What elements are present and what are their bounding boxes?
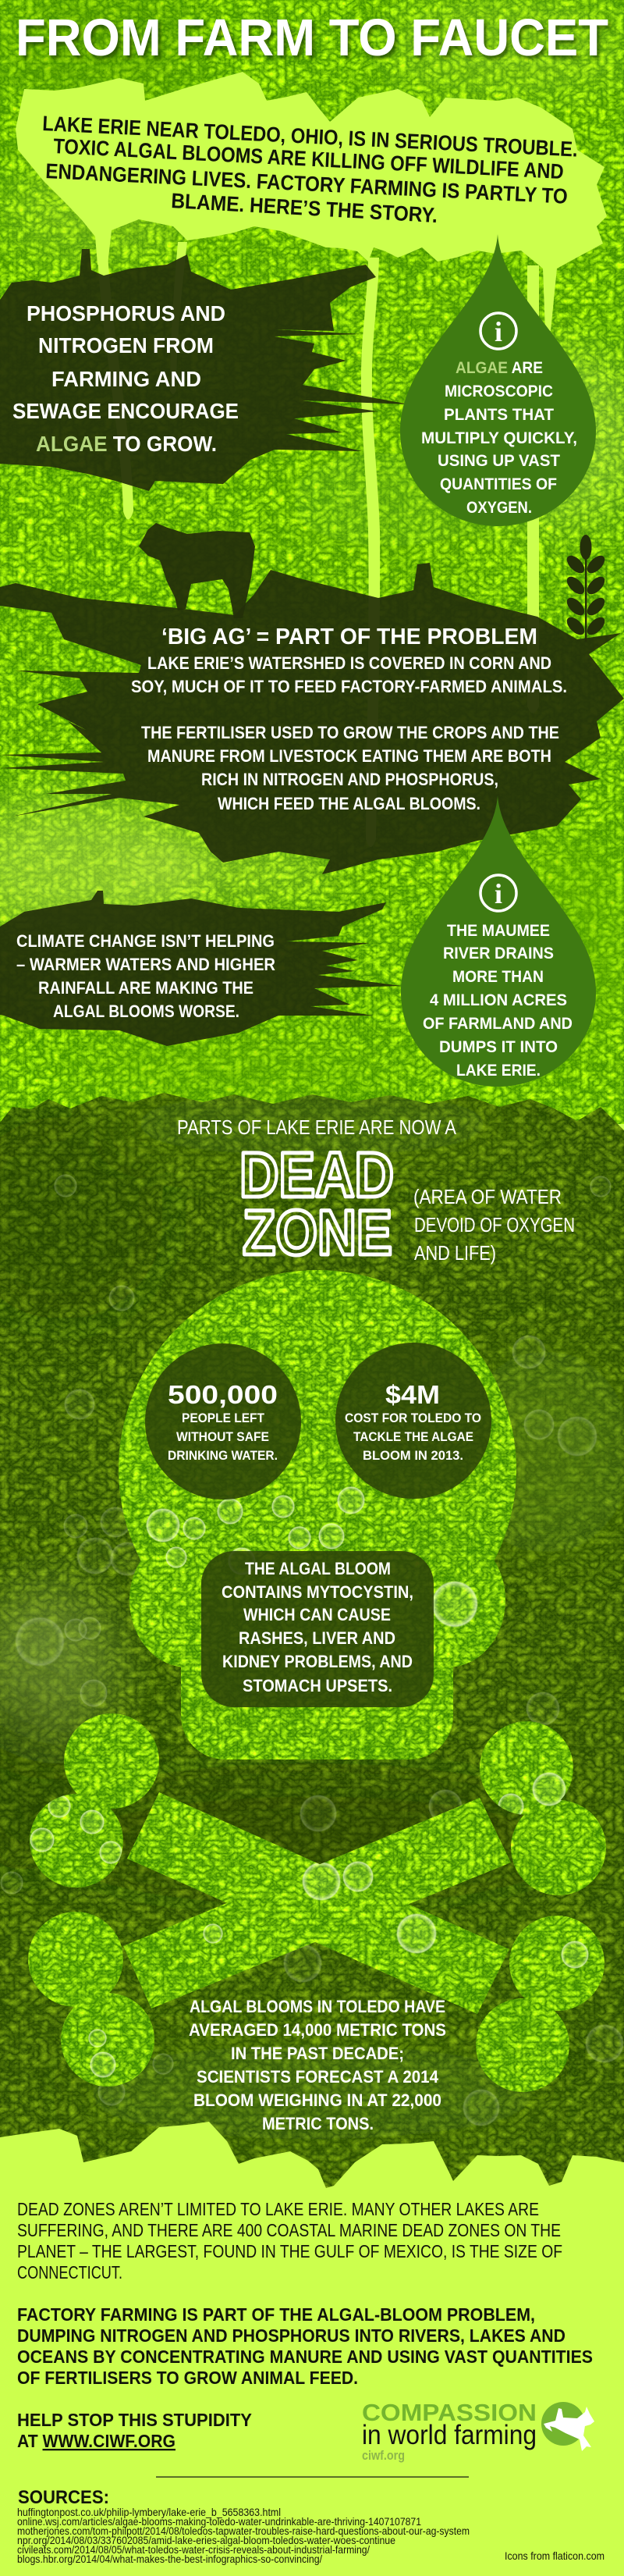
text: dead zones elsewhere [17, 2199, 562, 2282]
skull mouth: panel [201, 1551, 434, 1707]
stat: $4m: $4M [385, 1380, 440, 1409]
text: climate change: CLIMATE CHANGE ISN’T HELPING [16, 931, 275, 951]
text: phosphorus and nitrogen: ALGAE TO GROW. [36, 432, 217, 456]
text: big ag [131, 624, 567, 813]
bright bubbles inside the skull and bones [30, 1486, 589, 2078]
sources [17, 2487, 470, 2565]
text: maumee river [423, 922, 573, 1080]
text: algae definition [421, 359, 577, 517]
intro text block: TOXIC ALGAL BLOOMS ARE KILLING OFF WILDLIFE AND [53, 134, 564, 183]
icon: info circle [480, 875, 516, 911]
text: climate change [16, 931, 275, 1021]
intro text block [42, 112, 578, 227]
info drop: algae [400, 234, 596, 526]
icon: info circle: i [495, 878, 502, 909]
text: big ag: WHICH FEED THE ALGAL BLOOMS. [218, 794, 480, 813]
dead zone background: dark algae [0, 1085, 624, 2194]
stat: $4m: BLOOM IN 2013. [363, 1448, 463, 1463]
icon credit: Icons from flaticon.com [505, 2549, 604, 2562]
text: algae definition: PLANTS THAT [444, 406, 554, 424]
text: mytocystin: CONTAINS MYTOCYSTIN, [222, 1582, 413, 1602]
text: phosphorus and nitrogen [12, 301, 239, 456]
background: algae photo [0, 0, 624, 1124]
text: factory farming: OCEANS BY CONCENTRATING MANURE AND USING VAST QUANTITIES [17, 2347, 593, 2367]
text: big ag: THE FERTILISER USED TO GROW THE CROPS AND THE [141, 723, 559, 742]
text: dead zones elsewhere: DEAD ZONES AREN’T LIMITED TO LAKE ERIE. MANY OTHER LAKES ARE [17, 2199, 539, 2219]
text: climate change: ALGAL BLOOMS WORSE. [53, 1002, 239, 1021]
text: big ag: SOY, MUCH OF IT TO FEED FACTORY-FARMED ANIMALS. [131, 677, 567, 696]
logo: compassion in world farming [362, 2399, 594, 2463]
info drop: maumee river [401, 795, 596, 1087]
list of source links: motherjones.com/tom-philpott/2014/08/toledos-tapwater-troubles-raise-hard-questions-about-our-ag-system [17, 2524, 470, 2537]
intro text block: BLAME. HERE’S THE STORY. [171, 189, 438, 227]
text: mytocystin [222, 1559, 413, 1695]
text: factory farming [17, 2304, 593, 2388]
text: climate change: RAINFALL ARE MAKING THE [38, 978, 254, 998]
list of source links: civileats.com/2014/08/05/what-toledos-water-crisis-reveals-about-industrial-farming/ [17, 2543, 370, 2556]
text: algae definition: OXYGEN. [466, 499, 532, 517]
call to action [17, 2410, 252, 2451]
text: algal bloom tonnage: AVERAGED 14,000 METRIC TONS [189, 2020, 446, 2040]
text: mytocystin: STOMACH UPSETS. [243, 1676, 392, 1695]
text: big ag: LAKE ERIE’S WATERSHED IS COVERED IN CORN AND [147, 653, 551, 673]
heading: big ag: ‘BIG AG’ = PART OF THE PROBLEM [161, 624, 537, 649]
text: mytocystin: KIDNEY PROBLEMS, AND [222, 1652, 413, 1671]
text: phosphorus and nitrogen: PHOSPHORUS AND [27, 301, 225, 326]
logo: compassion in world farming: COMPASSION [362, 2399, 537, 2426]
text: definition [413, 1185, 575, 1265]
text: mytocystin: RASHES, LIVER AND [239, 1628, 395, 1648]
text: maumee river: THE MAUMEE [447, 922, 550, 940]
text: maumee river: OF FARMLAND AND [423, 1015, 573, 1033]
text: factory farming: OF FERTILISERS TO GROW ANIMAL FEED. [17, 2368, 358, 2388]
stat: 500,000: 500,000 [168, 1380, 278, 1409]
icon: leaping lamb [544, 2407, 594, 2451]
text: mytocystin: WHICH CAN CAUSE [243, 1605, 391, 1624]
text: algal bloom tonnage: BLOOM WEIGHING IN AT 22,000 [193, 2090, 441, 2110]
footer panel: lime slime [0, 2122, 624, 2576]
list of source links: online.wsj.com/articles/algae-blooms-making-toledo-water-undrinkable-are-thriving-1407107871 [17, 2515, 421, 2528]
lime slime panel behind intro [16, 72, 607, 331]
stat: $4m [345, 1380, 481, 1463]
text: algae definition: ALGAE ARE [456, 359, 543, 377]
icon: cow silhouette [139, 523, 255, 618]
text: maumee river: LAKE ERIE. [456, 1062, 541, 1080]
stat: 500,000: DRINKING WATER. [168, 1448, 278, 1463]
heading: dead: DEAD [239, 1140, 394, 1211]
dark splat: climate panel [0, 891, 402, 1046]
call to action: AT WWW.CIWF.ORG [17, 2431, 176, 2451]
text: algae definition: USING UP VAST [438, 452, 560, 470]
skull and crossbones: bright algae cut-out [16, 1265, 616, 2100]
heading: zone: ZONE [243, 1197, 392, 1268]
dark splat: phosphorus panel [0, 249, 410, 491]
skull right eye: panel [335, 1343, 491, 1499]
text: big ag: MANURE FROM LIVESTOCK EATING THEM ARE BOTH [147, 746, 551, 766]
icon: wheat stalk [564, 535, 608, 642]
intro text block: ENDANGERING LIVES. FACTORY FARMING IS PARTLY TO [45, 159, 568, 208]
faint bubbles in the dead zone [0, 1174, 624, 2126]
text: parts of lake erie: PARTS OF LAKE ERIE ARE NOW A [177, 1115, 457, 1139]
text: maumee river: 4 MILLION ACRES [430, 991, 567, 1009]
text: algal bloom tonnage: IN THE PAST DECADE; [231, 2044, 404, 2063]
text: factory farming: DUMPING NITROGEN AND PHOSPHORUS INTO RIVERS, LAKES AND [17, 2325, 566, 2346]
text: definition: AND LIFE) [414, 1241, 496, 1265]
text: dead zones elsewhere: CONNECTICUT. [17, 2262, 122, 2282]
heading: sources: SOURCES: [18, 2487, 109, 2508]
text: algae definition: MICROSCOPIC [445, 382, 553, 400]
text: definition: (AREA OF WATER [413, 1185, 562, 1208]
text: algae definition: QUANTITIES OF [440, 475, 557, 493]
skull left eye: panel [145, 1343, 301, 1500]
text: phosphorus and nitrogen: NITROGEN FROM [38, 333, 214, 358]
stat: 500,000 [168, 1380, 278, 1463]
text: algal bloom tonnage: SCIENTISTS FORECAST A 2014 [197, 2067, 439, 2087]
logo: compassion in world farming: ciwf.org [362, 2448, 405, 2463]
stat: 500,000: WITHOUT SAFE [176, 1429, 269, 1444]
lime slime drips [98, 242, 539, 847]
text: algal bloom tonnage [189, 1997, 446, 2133]
text: factory farming: FACTORY FARMING IS PART OF THE ALGAL-BLOOM PROBLEM, [17, 2304, 535, 2325]
text: maumee river: DUMPS IT INTO [439, 1038, 558, 1056]
text: maumee river: MORE THAN [452, 968, 544, 986]
list of source links: blogs.hbr.org/2014/04/what-makes-the-best-infographics-so-convincing/ [17, 2553, 322, 2565]
stat: 500,000: PEOPLE LEFT [182, 1411, 265, 1425]
dark splat: big ag panel [0, 563, 624, 874]
logo: compassion in world farming: in world farming [362, 2420, 537, 2450]
text: definition: DEVOID OF OXYGEN [414, 1213, 575, 1236]
text: phosphorus and nitrogen: SEWAGE ENCOURAGE [12, 399, 239, 423]
text: algal bloom tonnage: METRIC TONS. [262, 2114, 374, 2133]
list of source links: huffingtonpost.co.uk/philip-lymbery/lake-erie_b_5658363.html [17, 2506, 281, 2518]
text: algae definition: MULTIPLY QUICKLY, [421, 429, 577, 447]
stat: $4m: TACKLE THE ALGAE [353, 1429, 473, 1444]
list of source links [17, 2506, 470, 2565]
dead zone heading [177, 1115, 575, 1268]
call to action: HELP STOP THIS STUPIDITY [17, 2410, 252, 2430]
text: big ag: RICH IN NITROGEN AND PHOSPHORUS, [201, 770, 498, 789]
icon: info circle: i [495, 316, 502, 347]
text: phosphorus and nitrogen: FARMING AND [51, 367, 201, 391]
text: climate change: – WARMER WATERS AND HIGHER [16, 955, 275, 974]
divider [156, 2476, 469, 2478]
icon: info circle [480, 313, 516, 349]
text: mytocystin: THE ALGAL BLOOM [245, 1559, 391, 1578]
title: FROM FARM TO FAUCET [16, 9, 608, 67]
text: algal bloom tonnage: ALGAL BLOOMS IN TOLEDO HAVE [190, 1997, 445, 2016]
stat: $4m: COST FOR TOLEDO TO [345, 1411, 481, 1425]
list of source links: npr.org/2014/08/03/337602085/amid-lake-eries-algal-bloom-toledos-water-woes-continue [17, 2534, 395, 2546]
text: maumee river: RIVER DRAINS [443, 945, 554, 962]
